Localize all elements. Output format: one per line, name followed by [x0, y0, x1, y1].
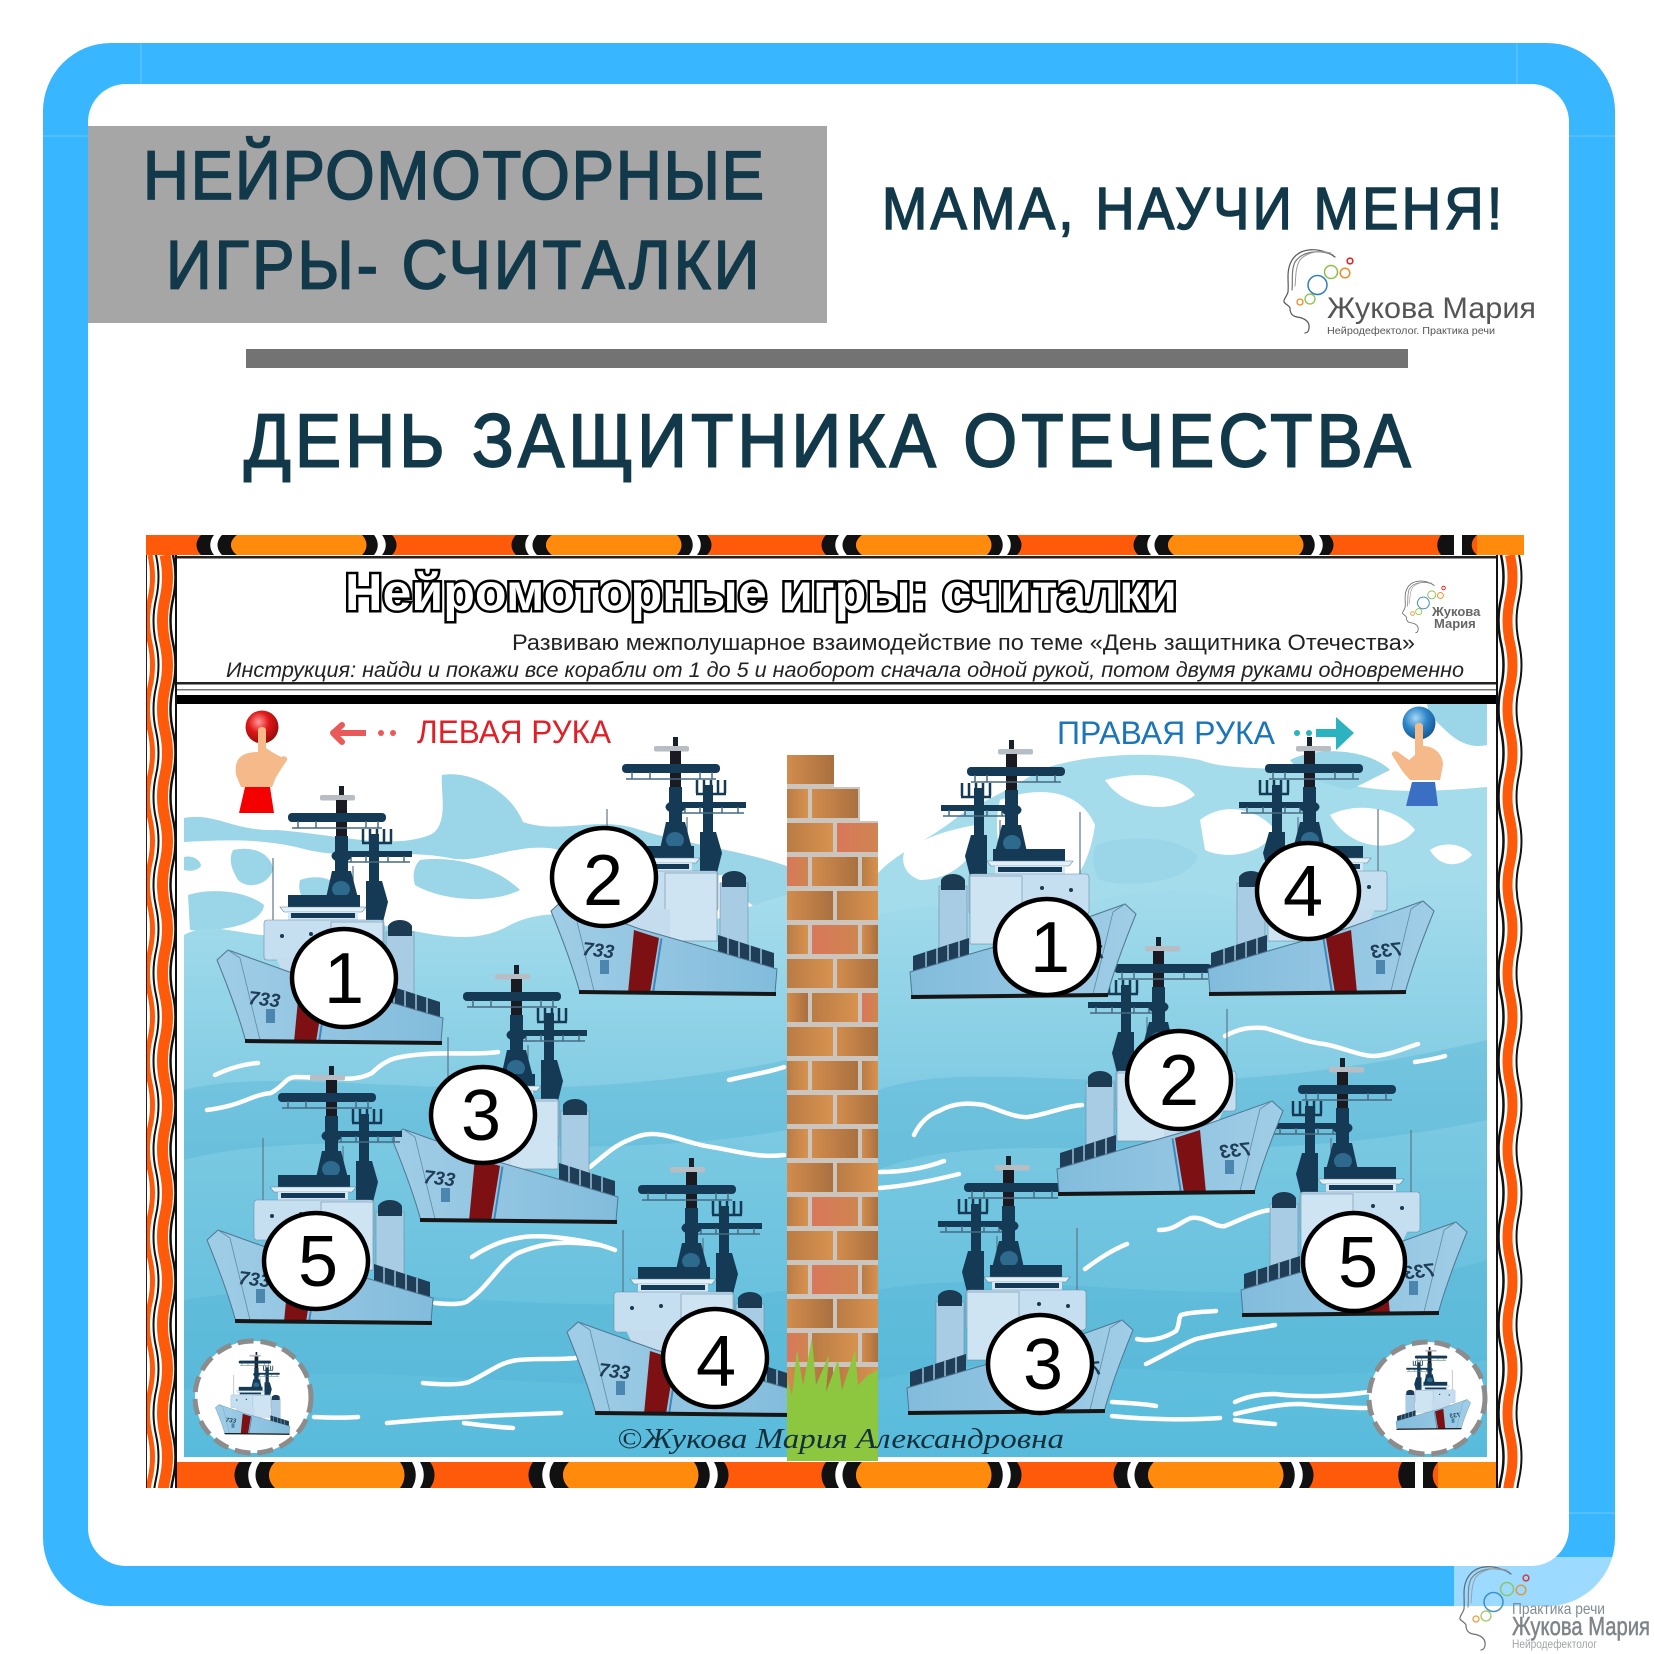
sea background	[184, 704, 1487, 1457]
badge 3 right: 3	[1023, 1325, 1063, 1405]
logo: Zhukova Maria: Жукова Мария	[1327, 292, 1536, 325]
badge 5 left	[264, 1213, 368, 1309]
right ribbon	[1496, 555, 1524, 1523]
left hand label	[333, 714, 612, 750]
top ribbon	[146, 535, 1524, 555]
badge 1 right	[995, 899, 1099, 995]
ship 5 left	[207, 1066, 433, 1323]
small logo	[1403, 581, 1481, 633]
grass	[787, 1338, 878, 1461]
medallion left	[195, 1341, 311, 1453]
brick wall	[787, 755, 878, 1400]
logo: Zhukova Maria	[1284, 250, 1536, 337]
panel: game sheet	[146, 535, 1524, 1523]
ship 1 left	[217, 786, 443, 1043]
panel: grey title block: НЕЙРОМОТОРНЫЕ	[143, 136, 764, 215]
ship 4 right	[1208, 737, 1434, 994]
ship 2 right	[1057, 937, 1283, 1194]
badge 2 right: 2	[1159, 1041, 1199, 1121]
badge 1 left	[292, 929, 396, 1027]
badge 3 left	[431, 1067, 535, 1163]
badge 2 right	[1127, 1031, 1231, 1129]
sheet instruction: Инструкция: найди и покажи все корабли от 1 до 5 и наоборот сначала одной рукой, потом двумя руками одновременно	[226, 659, 1464, 682]
bottom ribbon	[146, 1462, 1524, 1488]
heading: mama teach me: МАМА, НАУЧИ МЕНЯ!	[882, 177, 1502, 243]
number badges	[264, 828, 1405, 1413]
panel: grey title block	[88, 126, 827, 323]
ship 1 right	[910, 740, 1136, 997]
watermark logo: Практика речи	[1512, 1601, 1605, 1618]
left hand label: ЛЕВАЯ РУКА	[417, 714, 612, 750]
badge 5 right: 5	[1338, 1223, 1378, 1303]
right hand label: ПРАВАЯ РУКА	[1057, 715, 1276, 751]
sheet title: Нейромоторные игры: считалки	[345, 564, 1177, 622]
copyright line: ©Жукова Мария Александровна	[617, 1424, 1064, 1455]
badge 5 left: 5	[298, 1222, 338, 1302]
white wave streaks	[207, 1028, 1445, 1428]
logo: Zhukova Maria: Нейродефектолог. Практика речи	[1327, 325, 1495, 337]
watermark logo: Нейродефектолог	[1512, 1637, 1598, 1651]
badge 5 right	[1303, 1213, 1405, 1311]
icon: red button with left hand	[236, 710, 287, 813]
badge 3 left: 3	[461, 1076, 501, 1156]
ship 3 right	[907, 1156, 1133, 1413]
badge 2 left	[552, 828, 656, 926]
badge 1 left: 1	[324, 939, 364, 1019]
sheet subtitle: Развиваю межполушарное взаимодействие по теме «День защитника Отечества»	[512, 630, 1415, 655]
ship 3 left	[392, 965, 618, 1222]
ship 4 left	[567, 1158, 793, 1415]
left ribbon	[146, 555, 178, 1523]
badge 4 right: 4	[1283, 852, 1323, 932]
badge 1 right: 1	[1030, 908, 1070, 988]
badge 2 left: 2	[583, 841, 623, 921]
ship 2 left	[551, 737, 777, 994]
small logo: Мария	[1434, 616, 1476, 631]
badge 3 right	[988, 1315, 1092, 1413]
small logo: Жукова	[1431, 604, 1481, 619]
badge 4 left: 4	[696, 1322, 736, 1402]
heading: defender of the fatherland day: ДЕНЬ ЗАЩИТНИКА ОТЕЧЕСТВА	[244, 400, 1411, 483]
icon: blue button with right hand	[1392, 706, 1443, 806]
badge 4 right	[1257, 843, 1359, 939]
badge 4 left	[663, 1309, 767, 1407]
panel: sheet header	[177, 556, 1496, 704]
panel: grey title block: ИГРЫ- СЧИТАЛКИ	[166, 227, 759, 304]
ship 5 right	[1241, 1058, 1467, 1315]
medallion right	[1369, 1342, 1485, 1454]
watermark logo	[1454, 1557, 1650, 1651]
